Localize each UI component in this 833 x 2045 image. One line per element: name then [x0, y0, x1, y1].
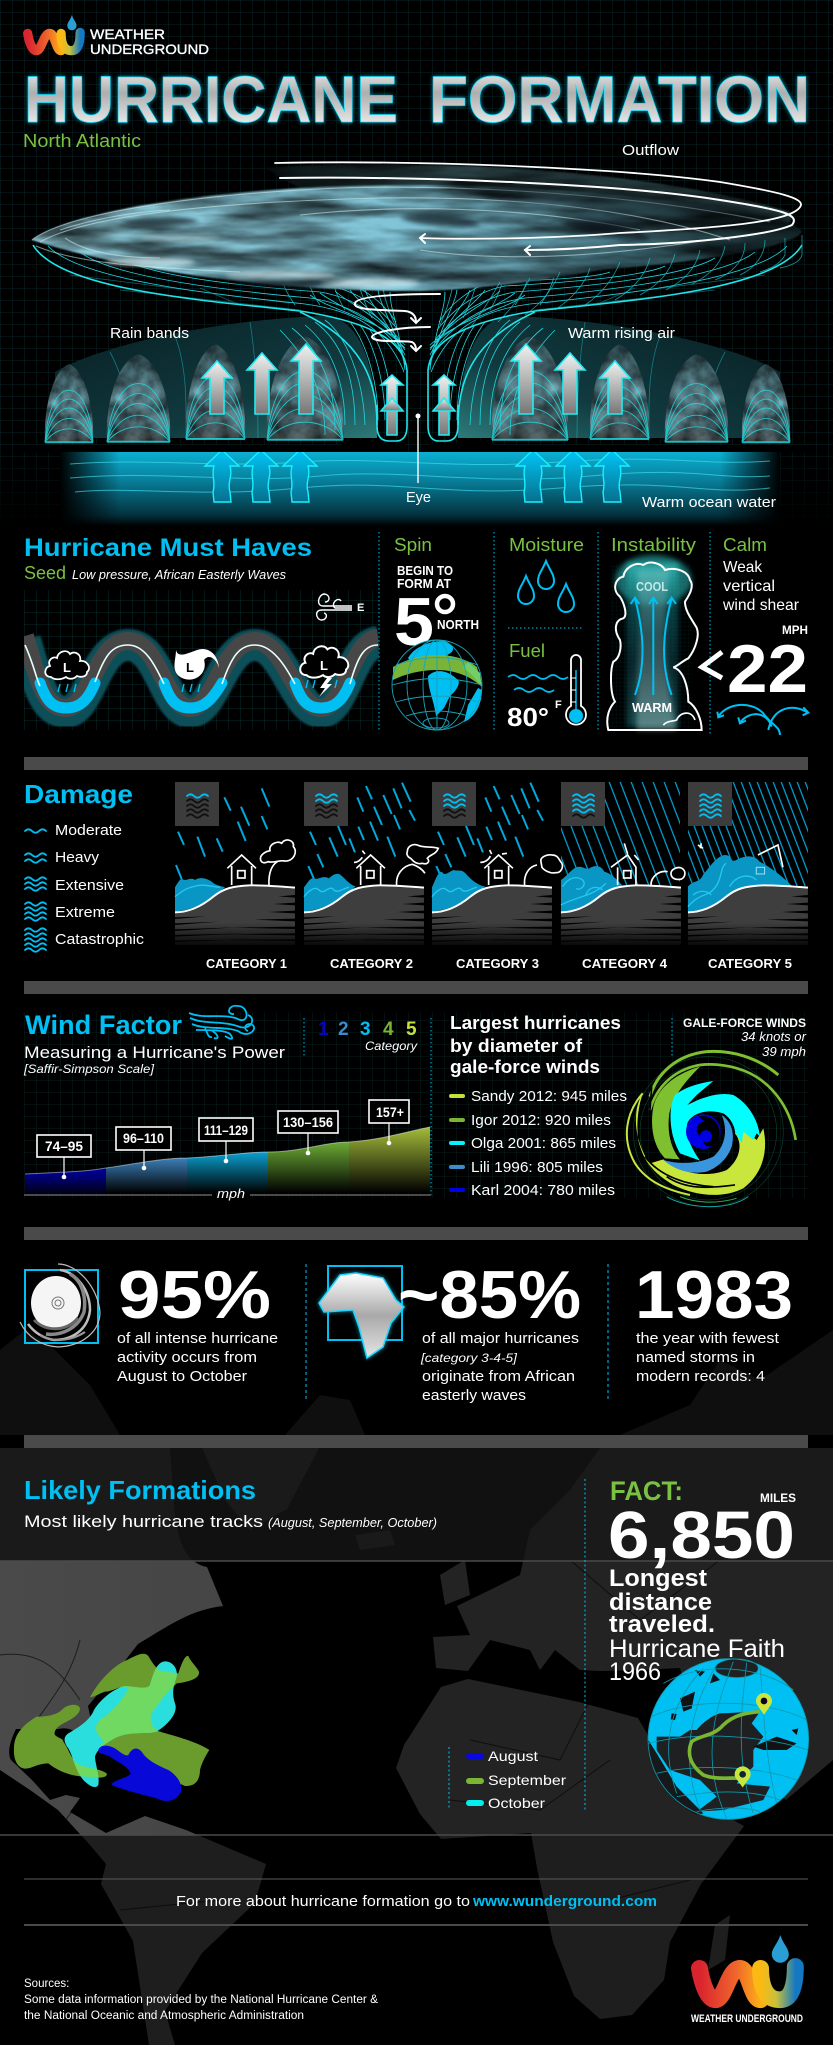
green arcs: [650, 1051, 778, 1097]
dotted dividers: [379, 532, 710, 735]
storm track map: [14, 1654, 209, 1801]
saffir-simpson chart: mph: [217, 1186, 245, 1201]
stat: 1983: named storms in: [636, 1349, 755, 1366]
category key: Category: [365, 1039, 418, 1053]
eye pointer: [416, 414, 420, 483]
stat: 1983: 1983: [635, 1257, 793, 1333]
seed subheading: Low pressure, African Easterly Waves: [72, 567, 286, 582]
stat: 85 percent: originate from African: [422, 1368, 575, 1385]
saffir-simpson chart: 74–95: [45, 1138, 83, 1154]
outflow swirl arrows: [275, 162, 801, 351]
panel: category 4: [561, 782, 685, 971]
scale note: [Saffir-Simpson Scale]: [23, 1062, 155, 1076]
rain bands right: [428, 245, 815, 452]
largest hurricanes list: Karl 2004: 780 miles: [471, 1182, 615, 1199]
stat: 95 percent: [20, 1257, 278, 1385]
panel: category 2: CATEGORY 2: [330, 956, 413, 971]
label: eye: Eye: [406, 489, 431, 506]
category key: 3: [360, 1019, 371, 1040]
largest hurricanes list: Olga 2001: 865 miles: [471, 1135, 616, 1152]
category key: 2: [338, 1019, 349, 1040]
background grid: [0, 0, 833, 530]
divider bar: [24, 1227, 808, 1240]
saffir-simpson chart: 111–129: [204, 1122, 248, 1138]
saffir-simpson chart: 96–110: [123, 1130, 164, 1146]
footer call to action: [24, 1879, 808, 1925]
icon: globe with tropical band: [392, 640, 482, 730]
saffir-simpson chart: 130–156: [283, 1114, 333, 1130]
section: wind factor: [23, 1006, 807, 1207]
largest hurricanes list: Igor 2012: 920 miles: [471, 1112, 611, 1129]
stat: 85 percent: ~85%: [398, 1257, 581, 1333]
stat: 85 percent: of all major hurricanes: [422, 1330, 579, 1347]
stat: 95 percent: 95%: [118, 1257, 271, 1333]
panel: category 3: CATEGORY 3: [456, 956, 539, 971]
icon: wind swirls: [189, 1006, 254, 1039]
fact text: Longest: [609, 1565, 707, 1592]
panel: spin: Spin: [394, 535, 432, 555]
fact text: [609, 1565, 785, 1686]
title: FORMATION: [429, 62, 810, 136]
panel: instability: COOL: [636, 579, 668, 594]
icon: thunderstorm cloud: [300, 646, 348, 697]
miles unit: MILES: [760, 1491, 796, 1505]
icon: tropical storm: [174, 649, 219, 692]
funnel mesh: [48, 246, 405, 435]
section: damage: [24, 779, 808, 971]
panel: calm: Weak: [723, 559, 763, 576]
label: warm rising air: Warm rising air: [568, 325, 675, 342]
panel: moisture: Moisture: [509, 535, 584, 555]
largest hurricanes heading: gale-force winds: [450, 1057, 600, 1077]
seed subheading: Seed: [24, 563, 66, 583]
panel: calm: [702, 535, 808, 735]
stat: 1983: the year with fewest: [636, 1330, 780, 1347]
arrows: warm rising air: [202, 344, 630, 435]
ocean: [60, 450, 780, 526]
stat: 95 percent: August to October: [117, 1368, 247, 1385]
icon: thunderstorm cloud: L: [320, 658, 328, 673]
footer logo: WEATHER UNDERGROUND: [691, 2013, 803, 2025]
fact panel: [585, 1476, 809, 1819]
panel: category 5: [688, 782, 808, 971]
panel: spin: BEGIN TO: [397, 563, 453, 578]
panel: calm: Calm: [723, 535, 767, 555]
panel: category 4: CATEGORY 4: [582, 956, 668, 971]
80 degrees: F: [555, 699, 562, 711]
label: outflow: Outflow: [622, 142, 679, 159]
stat: 85 percent: [319, 1257, 581, 1404]
damage legend: Moderate: [55, 822, 122, 839]
footer call to action: For more about hurricane formation go to: [176, 1893, 470, 1910]
stat: 95 percent: activity occurs from: [117, 1349, 257, 1366]
fact text: traveled.: [609, 1611, 715, 1638]
icon: ocean waves: [508, 675, 568, 692]
footer logo: [691, 1935, 803, 2025]
footer call to action: www.wunderground.com: [472, 1893, 657, 1910]
map legend: [449, 1747, 566, 1811]
logo: weather underground: UNDERGROUND: [90, 41, 209, 57]
panel: category 5: CATEGORY 5: [708, 956, 792, 971]
largest hurricanes list: Lili 1996: 805 miles: [471, 1159, 603, 1176]
panel: spin: 5: [394, 584, 434, 660]
category key: [318, 1019, 418, 1053]
storm disk: [32, 164, 802, 291]
title: HURRICANE: [24, 62, 398, 136]
panel: calm: vertical: [723, 578, 775, 595]
heading: Wind Factor: [25, 1010, 182, 1040]
largest hurricanes list: [449, 1088, 627, 1199]
fact text: Hurricane Faith: [609, 1635, 785, 1663]
largest hurricanes list: Sandy 2012: 945 miles: [471, 1088, 627, 1105]
subheading: (August, September, October): [268, 1516, 437, 1530]
panel: spin: [392, 535, 482, 730]
hurricane diagram: [20, 162, 815, 526]
section: likely formations: [14, 1475, 566, 1811]
icon: tropical storm: L: [186, 660, 194, 675]
sources: [24, 1978, 378, 2022]
gale-force label: 34 knots or: [741, 1029, 807, 1044]
largest hurricanes heading: Largest hurricanes: [450, 1013, 621, 1033]
panel: instability: Instability: [611, 535, 696, 555]
stat: 85 percent: [category 3-4-5]: [420, 1351, 518, 1365]
section: hurricane must haves: [24, 532, 808, 735]
panel: moisture: [507, 535, 586, 732]
icon: water drops: [518, 561, 574, 612]
stat: 1983: modern records: 4: [636, 1368, 765, 1385]
icon: low pressure cloud: [45, 651, 89, 692]
heading: Likely Formations: [24, 1475, 256, 1505]
sources: Sources:: [24, 1978, 69, 1990]
map legend: August: [488, 1748, 538, 1764]
icon: wind east: [317, 594, 364, 620]
easterly wave diagram: [24, 590, 379, 730]
icon: wind east: E: [357, 602, 364, 614]
icon: thermometer: [566, 655, 586, 725]
panel: instability: WARM: [632, 700, 672, 715]
category key: 5: [406, 1019, 417, 1040]
damage legend: [25, 822, 145, 952]
gale-force label: [683, 1016, 807, 1059]
rain bands left: [20, 245, 407, 452]
big number: 6,850: [608, 1498, 795, 1573]
panel: spin: NORTH: [437, 617, 479, 632]
fact heading: FACT:: [610, 1476, 683, 1506]
divider bar: [24, 1435, 808, 1448]
label: rain bands: Rain bands: [110, 325, 189, 342]
stat: 95 percent: of all intense hurricane: [117, 1330, 278, 1347]
largest hurricanes heading: by diameter of: [450, 1036, 583, 1056]
logo: weather underground: WEATHER: [90, 26, 165, 42]
saffir-simpson chart: 157+: [376, 1104, 404, 1120]
outflow ribs: [470, 235, 802, 328]
sources: Some data information provided by the National Hurricane Center &: [24, 1994, 378, 2006]
icon: light wind arcs: [717, 705, 808, 735]
panel: calm: 22: [727, 631, 808, 707]
section: statistics: [20, 1257, 793, 1404]
gale-force label: GALE-FORCE WINDS: [683, 1016, 806, 1030]
panel: spin: FORM AT: [397, 576, 451, 591]
hurricane size swirl: [627, 1051, 796, 1207]
logo: weather underground: [28, 15, 209, 57]
world map backdrop: [0, 1330, 833, 2045]
largest hurricanes heading: [450, 1013, 621, 1077]
panel: calm: wind shear: [722, 597, 800, 614]
map legend: September: [488, 1772, 566, 1788]
heading: Hurricane Must Haves: [24, 534, 312, 562]
subheading: Measuring a Hurricane's Power: [24, 1043, 285, 1062]
gale-force label: 39 mph: [762, 1044, 806, 1059]
80 degrees: 80°: [507, 702, 549, 732]
panel: category 1: [175, 782, 295, 971]
saffir-simpson chart: [24, 1100, 431, 1201]
icon: white hurricane: [20, 1264, 100, 1347]
subheading: [24, 1512, 437, 1531]
panel: category 1: CATEGORY 1: [206, 956, 287, 971]
damage legend: Catastrophic: [55, 931, 145, 948]
sources: the National Oceanic and Atmospheric Administration: [24, 2010, 304, 2022]
category key: 4: [383, 1019, 394, 1040]
damage legend: Extreme: [55, 904, 115, 921]
grid behind wind factor: [24, 1012, 808, 1198]
damage legend: Extensive: [55, 877, 124, 894]
icon: globe with hurricane faith track: [648, 1659, 809, 1819]
icon: africa: [319, 1273, 404, 1358]
icon: low pressure cloud: L: [63, 660, 71, 675]
damage legend: Heavy: [55, 849, 100, 866]
heading: Damage: [24, 779, 133, 809]
label: warm ocean water: Warm ocean water: [642, 494, 776, 511]
fact text: distance: [609, 1589, 712, 1616]
title: [24, 62, 810, 136]
panel: calm: MPH: [782, 623, 808, 637]
stat: 1983: [635, 1257, 793, 1385]
fuel heading: Fuel: [509, 641, 545, 661]
panel: category 3: [432, 782, 562, 971]
divider bar: [24, 757, 808, 770]
icon: convection cloud: [607, 555, 702, 730]
seed subheading: [24, 563, 286, 583]
panel: category 2: [304, 782, 438, 971]
category key: 1: [318, 1019, 329, 1040]
stat: 85 percent: easterly waves: [422, 1387, 526, 1404]
divider bar: [24, 981, 808, 994]
map legend: October: [488, 1795, 545, 1811]
subtitle: North Atlantic: [23, 131, 141, 151]
subheading: Most likely hurricane tracks: [24, 1512, 263, 1531]
panel: instability: [607, 535, 702, 730]
fact text: 1966: [609, 1658, 661, 1686]
80 degrees: [507, 699, 562, 732]
